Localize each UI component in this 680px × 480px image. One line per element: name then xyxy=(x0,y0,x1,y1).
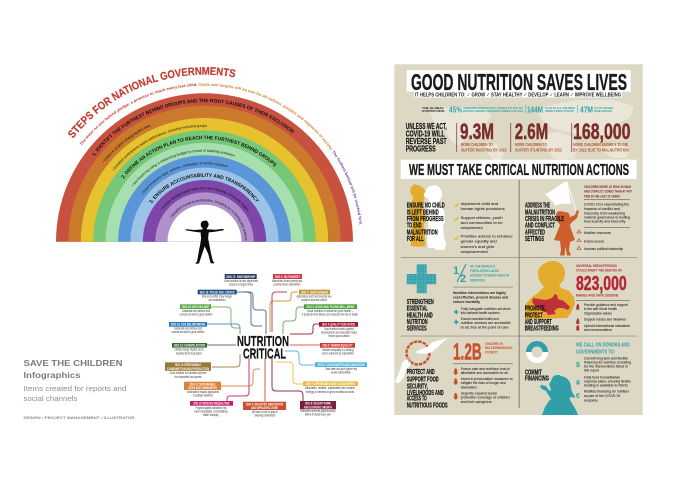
stat: 1.2B: POVERTY xyxy=(485,350,499,354)
diagram: nutrition critical SDG network xyxy=(165,274,367,418)
step 3 heading: 3. ENSURE ACCOUNTABILITY AND TRANSPARENCY xyxy=(149,173,260,204)
SDG 6: SDG 6: CLEAN WATER AND SANITATION xyxy=(318,363,365,367)
heading: PROTECT xyxy=(525,312,543,319)
stat: 2.6M: SUFFER STUNTING BY 2022 xyxy=(515,148,563,152)
conflict risk text: food scarcity and insecurity. xyxy=(584,220,626,224)
stat: 168,000: MORE CHILDREN UNDER 5 TO DIE xyxy=(573,142,628,147)
global nutrition crisis stats: DEATHS AMONG CHILDREN UNDER 5 IN 2019 xyxy=(463,109,523,113)
conflict risk text xyxy=(584,185,632,228)
stat: 2.6M: 2.6M xyxy=(515,119,548,144)
icon: orange girl holding white flag xyxy=(545,181,579,256)
SDG 7: Affordable, reliable, sustainable and modern xyxy=(305,386,355,390)
global nutrition crisis stats: 21.3% OF ALL CHILDREN xyxy=(545,106,575,110)
SDG 16: War and conflict show hunger xyxy=(202,294,233,298)
SDG 9: SDG 9: INDUSTRY, INNOVATION xyxy=(246,402,283,406)
SDG 12: Good nutrition is a needed outcome xyxy=(170,371,207,375)
food security actions: starvation. xyxy=(461,385,478,389)
food security actions: affordable and accessible for all. xyxy=(461,371,509,375)
SDG 10: SDG 10: REDUCED INEQUALITIES xyxy=(194,402,230,406)
interventions text: to all, free at the point of care xyxy=(461,325,509,329)
stat: one half: ACCESS TO BASIC HEALTH xyxy=(470,274,509,278)
global nutrition crisis stats: 47M xyxy=(580,105,593,114)
donor actions: Fully fund humanitarian xyxy=(584,375,620,379)
section: commit financing xyxy=(525,343,631,415)
donor actions: Mobilise financing for nutrition xyxy=(584,390,629,394)
breastfeeding actions: Uphold international standards xyxy=(584,324,630,328)
heading: MALNUTRITION xyxy=(525,209,555,216)
step 2 bullet b: • Enact treatment laws, policies, campaigns to tackle exclusion xyxy=(142,162,228,194)
stat: 823,000: COULD AVERT THE DEATHS OF xyxy=(576,269,623,273)
icon: gold mother and red baby xyxy=(525,261,575,319)
stat: 9.3M: MORE CHILDREN TO xyxy=(461,142,493,147)
donor actions: as part of the COVID-19 xyxy=(584,394,620,398)
SDG 3 xyxy=(302,304,358,317)
SDG 15: Sustainable and nutritious food xyxy=(182,309,210,313)
SDG 1: poverty drives malnutrition xyxy=(274,282,301,286)
heading: NUTRITION xyxy=(407,319,428,326)
heading xyxy=(407,299,434,332)
SDG 3: it protects from illness and reduces the risk of death xyxy=(302,313,358,317)
heading: IS LEFT BEHIND xyxy=(407,209,439,216)
heading xyxy=(407,203,445,243)
icon: wheat ring and white hands xyxy=(395,338,448,383)
stat: 9.3M xyxy=(456,119,507,152)
stat: 1.2B: MULTIDIMENSIONAL xyxy=(485,346,514,350)
interventions text: nutrition services are accessible xyxy=(461,321,511,325)
donor actions: this report xyxy=(584,369,599,373)
breastfeeding actions: Support nurses and midwives xyxy=(584,318,626,322)
food security actions xyxy=(453,367,513,404)
checklist xyxy=(454,202,513,254)
checklist: Prioritise actions to enhance xyxy=(461,235,513,239)
SDG 4: SDG 4: QUALITY EDUCATION xyxy=(322,323,355,327)
SDG 13: impacted by the food system xyxy=(176,352,202,356)
caption: save the children infographics: Infographics xyxy=(24,370,81,380)
SDG 6: avoid malnutrition xyxy=(331,370,351,374)
stat: one half: SERVICES xyxy=(470,278,486,282)
title: steps for national governments: STEPS FOR NATIONAL GOVERNMENTS xyxy=(68,67,236,138)
section: ensure no child is left behind xyxy=(407,184,513,254)
heading: SETTINGS xyxy=(525,236,544,243)
stat: 1.2B: CHILDREN IN xyxy=(485,342,503,346)
donor actions: € xyxy=(576,393,580,400)
SDG 5: Gender inequality is a driving, xyxy=(322,348,354,352)
donor actions: funding is available to NGOs xyxy=(584,384,628,388)
subheading with checkmarks: IT HELPS CHILDREN TO: ✓ GROW ✓ STAY HEALTHY ✓ DEVELOP ✓ LEARN ✓ IMPROVE WELLBEING xyxy=(415,93,621,99)
SDG 9: AND INFRASTRUCTURE xyxy=(251,406,278,410)
food security actions: mitigate the risks of hunger and xyxy=(461,381,506,385)
heading: STRENGTHEN xyxy=(407,299,434,306)
actions list: Ensure access xyxy=(584,240,604,244)
SDG 13: Climate change impacts and is xyxy=(174,348,204,352)
SDG 16 xyxy=(198,290,237,302)
SDG 4: development and education helps xyxy=(321,330,357,334)
section dividers xyxy=(401,180,637,408)
step 3 bullet a: • Publish disaggregated data and start mapping community targets xyxy=(161,186,249,212)
checklist: empowerment xyxy=(461,250,488,254)
SDG 5: SDG 5: GENDER EQUALITY xyxy=(322,344,353,348)
SDG 11: CITIES AND COMMUNITIES xyxy=(188,386,217,390)
call to donors heading: GOVERNMENTS TO: xyxy=(576,349,615,355)
global nutrition crisis stats: THE GLOBAL xyxy=(422,106,444,110)
SDG 5: and is enforced by malnutrition xyxy=(322,352,354,356)
global nutrition crisis stats: NUTRITION CRISIS: xyxy=(422,109,445,113)
heading: NUTRITIOUS FOODS xyxy=(407,403,448,410)
conflict risk text: COVID-19 is exacerbating the xyxy=(584,203,629,207)
conflict risk text: impacts of conflict and xyxy=(584,207,620,211)
SDG 9 xyxy=(243,402,286,418)
icon: teal woman xyxy=(540,375,578,415)
checklist: Support children, youth xyxy=(461,216,503,220)
global nutrition crisis stats: UNDER 5 WERE STUNTED xyxy=(545,109,574,113)
donor actions: Commit long-term and flexible xyxy=(584,356,628,360)
conflict risk text: national governance to fuelling xyxy=(584,215,630,219)
stat: 823,000: BABIES AND SAVE US$300B xyxy=(576,293,618,297)
heading: nutrition critical: NUTRITION xyxy=(237,333,289,350)
conflict risk text: TIME IN THE LAST 20 YEARS xyxy=(584,194,620,198)
SDG 12: SDG 12: RESPONSIBLE xyxy=(175,363,201,367)
heading: nutrition critical xyxy=(237,333,289,362)
SDG 10: wider inequity. xyxy=(203,413,219,417)
donor actions: response xyxy=(584,398,598,402)
SDG 1: Malnutrition drives poverty and xyxy=(272,279,302,283)
interventions text xyxy=(453,291,511,329)
heading: SUPPORT FOOD xyxy=(407,376,439,383)
SDG 15 xyxy=(180,304,213,316)
SDG 11: to tackling malnutrition xyxy=(193,394,213,398)
caption: save the children infographics xyxy=(24,358,135,420)
SDG 17: Good nutrition is inter-dependent xyxy=(224,279,258,283)
text: unless we act: COVID-19 WILL xyxy=(406,130,445,139)
SDG 8: Malnutrition prevents global economy xyxy=(300,409,336,413)
actions list: Increase political leadership xyxy=(584,247,623,251)
caption: save the children infographics: social channels xyxy=(24,394,78,403)
SDG 4 xyxy=(319,322,358,338)
stat: 2.6M: MORE CHILDREN TO xyxy=(515,142,548,147)
icon: teal medical cross xyxy=(407,264,436,293)
heading xyxy=(525,369,549,383)
donor actions xyxy=(576,356,631,402)
checklist: empowered xyxy=(461,226,483,230)
breastfeeding actions: Organization advice xyxy=(584,311,612,315)
actions list: Mobilise resources xyxy=(584,231,611,235)
heading xyxy=(525,203,564,243)
heading: FINANCING xyxy=(525,376,549,383)
heading: SERVICES xyxy=(407,325,427,332)
step 1 heading: 1. IDENTIFY THE FURTHEST BEHIND GROUPS AND THE ROOT CAUSES OF THEIR EXCLUSION xyxy=(92,98,294,156)
food security actions: and their caregivers. xyxy=(461,400,493,404)
heading: PROTECT AND xyxy=(407,369,435,376)
interventions text: reduce mortality xyxy=(453,300,481,304)
panel: good nutrition saves lives xyxy=(394,64,643,415)
heading: FOR ALL xyxy=(407,236,424,243)
SDG 2: Agriculture and food security are xyxy=(296,294,332,298)
global nutrition crisis stats: WERE WASTED xyxy=(594,109,612,113)
call to donors heading: WE CALL ON DONORS AND xyxy=(576,343,630,349)
global nutrition crisis stats xyxy=(422,105,613,114)
SDG 1 xyxy=(272,274,302,286)
stat: 168,000 xyxy=(571,119,630,152)
conflict risk text: AND CONFLICT ZONES THAN AT ANY xyxy=(584,190,632,194)
SDG 6 xyxy=(315,362,367,374)
SDG 6: Clean water and good hygiene help xyxy=(325,367,357,371)
SDG 7: energy is needed to grow nutritious foods xyxy=(306,390,354,394)
pledge subtitle arc: The leave no one behind pledge: a promise to reach every last child. Goals and targets will be met for all nations, peoples and segments of society. The furthest behind will be reached first. xyxy=(80,82,362,226)
food security actions: Invest in preservation measures to xyxy=(461,377,513,381)
SDG 4: Good nutrition boosts cognitive xyxy=(324,327,354,331)
SDG 10 xyxy=(190,401,233,417)
heading: AFFECTED xyxy=(525,229,545,236)
SDG 14 xyxy=(169,322,207,334)
conflict risk text: insecurity, from weakening xyxy=(584,211,625,215)
actions list xyxy=(577,230,623,251)
stat: one half: OF THE WORLD'S xyxy=(470,264,496,268)
heading: LIVELIHOODS AND xyxy=(407,390,444,397)
text: unless we act xyxy=(406,122,447,154)
heading: PROMOTE, xyxy=(525,306,546,313)
SDG 4: inform good nutrition xyxy=(328,334,350,338)
SDG 11 xyxy=(184,382,221,398)
SDG 12 xyxy=(165,362,211,379)
SDG 10: Progress against malnutrition has xyxy=(196,406,227,410)
stat: 823,000: UNIVERSAL BREASTFEEDING xyxy=(576,264,617,268)
SDG 17 xyxy=(224,274,258,286)
step 2 bullet a: • Set financing using a disbursing budget to invest in tackling exclusion xyxy=(132,149,235,186)
donor actions: response plans, ensuring flexible xyxy=(584,380,631,384)
stat: 9.3M: 9.3M xyxy=(460,119,494,144)
heading: AND SUPPORT xyxy=(525,319,552,326)
SDG 11: Urbanisation impacts approaches xyxy=(187,390,219,394)
SDG 3: SDG 3: GOOD HEALTH AND WELL-BEING xyxy=(306,305,355,309)
call to donors heading xyxy=(576,343,630,355)
heading: MALNUTRITION xyxy=(407,229,438,236)
conflict risk text: CHILDREN MORE AT RISK IN WAR xyxy=(584,185,631,189)
interventions text: Fully integrate nutrition services xyxy=(461,307,511,311)
icon: gold and white children xyxy=(409,184,446,250)
stat: 168,000: BY 2022 DUE TO MALNUTRITION xyxy=(573,148,629,152)
SDG 16: SDG 16: PEACE AND JUSTICE xyxy=(200,290,235,294)
heading: BREASTFEEDING xyxy=(525,326,559,333)
stat: one half: 2 xyxy=(460,273,466,285)
stat: 1.2B: 1.2B xyxy=(453,338,482,364)
food security actions: protection coverage of children xyxy=(461,396,510,400)
donor actions: for the interventions listed in xyxy=(584,364,628,368)
stat: one half xyxy=(453,264,513,288)
heading: COMMIT xyxy=(525,369,542,376)
panel: rainbow steps for national governments xyxy=(56,67,362,264)
breastfeeding actions xyxy=(576,303,630,332)
breastfeeding actions: and recommendations xyxy=(584,328,612,332)
step 1 bullet b: • Establish participatory public deliberations, including excluded groups xyxy=(112,124,207,170)
heading: CRISIS IN FRAGILE xyxy=(525,216,564,223)
SDG 9: All have a role to play in xyxy=(252,410,278,414)
SDG 13 xyxy=(172,343,207,356)
SDG 13: SDG 13: CLIMATE ACTION xyxy=(174,344,205,348)
stat: one half: POPULATION LACKS xyxy=(470,269,500,273)
heading: ENSURE NO CHILD xyxy=(407,203,445,210)
caption: save the children infographics: SAVE THE CHILDREN xyxy=(24,358,122,368)
SDG 12: from responsible food systems xyxy=(174,375,202,379)
heading: SECURITY, xyxy=(407,383,428,390)
rainbow bands xyxy=(56,93,353,242)
SDG 15: sources are vital for good nutrition xyxy=(180,312,213,316)
SDG 17: SDG 17: PARTNERSHIP xyxy=(226,275,256,279)
SDG 14: SDG 14: LIFE BELOW WATER xyxy=(171,323,205,327)
section: protect and support food security xyxy=(395,338,514,410)
stat: 9.3M: SUFFER WASTING BY 2022 xyxy=(461,148,507,152)
heading xyxy=(407,369,448,410)
heading: nutrition critical: CRITICAL xyxy=(243,346,286,362)
global nutrition crisis stats: 45% xyxy=(449,105,462,114)
donor actions: financing for nutrition, including xyxy=(584,360,631,364)
checklist: women's and girls' xyxy=(461,245,495,249)
heading: ESSENTIAL xyxy=(407,306,428,313)
step 1 bullet a: • Collect & analyse disaggregated data xyxy=(103,124,151,162)
SDG 2: SDG 2: ZERO HUNGER xyxy=(301,290,328,294)
SDG 5 xyxy=(320,343,355,356)
SDG 2: crucial for improved nutrition xyxy=(301,298,327,302)
heading: AND CONFLICT xyxy=(525,223,555,230)
connector lines xyxy=(207,292,320,401)
heading: ACCESS TO xyxy=(407,396,427,403)
interventions text: cost-effective, prevent disease and xyxy=(453,295,509,299)
SDG 1: SDG 1: NO POVERTY xyxy=(275,275,301,279)
global nutrition crisis stats: UNDERNUTRITION WAS LINKED TO 45% OF xyxy=(463,106,523,110)
stat: 823,000: 823,000 xyxy=(576,273,627,295)
text: unless we act: PROGRESS xyxy=(406,145,436,154)
text: unless we act: UNLESS WE ACT, xyxy=(406,122,447,131)
SDG 17: success on emerged children xyxy=(229,282,253,286)
interventions text: Nutrition interventions are highly xyxy=(453,291,507,295)
icon: donut of coins xyxy=(529,344,545,360)
global nutrition crisis stats: 6.9% OF CHILDREN xyxy=(594,106,613,110)
stat: one half: 1 xyxy=(453,265,459,277)
breastfeeding actions: Provide guidance and support xyxy=(584,303,628,307)
SDG 8: SDG 8: DECENT WORK xyxy=(305,402,331,406)
food security actions: Urgently expand social xyxy=(461,392,497,396)
SDG 8: AND ECONOMIC GROWTH xyxy=(304,405,332,409)
caption: save the children infographics: Items created for reports and xyxy=(24,384,126,393)
caption: save the children infographics: DESIGN • PROJECT MANAGEMENT • ILLUSTRATOR xyxy=(24,415,135,420)
heading: ADDRESS THE xyxy=(525,203,550,210)
heading: TO END xyxy=(407,223,422,230)
SDG 3: Good nutrition is critical for good health – xyxy=(307,309,353,313)
SDG 7: SDG 7: AFFORDABLE AND CLEAN ENERGY xyxy=(306,382,355,386)
food security actions: Ensure safe and nutritious food is xyxy=(461,367,510,371)
checklist: gender equality and xyxy=(461,240,497,244)
step 3 bullet b: • Establish inclusive participation, including for excluding data sections xyxy=(170,198,247,240)
SDG 9: lowering malnutrition xyxy=(254,414,276,418)
breastfeeding actions: in line with World Health xyxy=(584,307,617,311)
icon: child silhouette with arms outstretched xyxy=(186,220,224,264)
SDG 2 xyxy=(296,290,332,302)
checklist: and communities to be xyxy=(461,221,503,225)
stat: 168,000: 168,000 xyxy=(573,119,630,144)
section: strengthen essential health xyxy=(407,264,513,332)
text: unless we act: REVERSE PAST xyxy=(406,137,447,146)
SDG 8: billions of dollars every year xyxy=(305,413,332,417)
SDG 10: been inequitable, consolidating xyxy=(194,409,228,413)
interventions text: into national health systems xyxy=(461,311,500,315)
heading: HEALTH AND xyxy=(407,312,433,319)
heading xyxy=(525,306,559,333)
stat: 823,000 xyxy=(576,264,630,301)
section: breastfeeding xyxy=(525,261,630,333)
step 2 heading: 2. DEFINE AN ACTION PLAN TO REACH THE FURTHEST BEHIND GROUPS xyxy=(121,136,276,179)
section: address the malnutrition crisis xyxy=(525,181,632,256)
world map xyxy=(430,100,634,160)
SDG 11: SDG 11: SUSTAINABLE xyxy=(190,382,216,386)
SDG 14: Sustainable and nutritious food xyxy=(174,326,202,330)
heading: FROM PROGRESS xyxy=(407,216,444,223)
SDG 8 xyxy=(300,401,336,417)
SDG 16: and malnutrition xyxy=(208,298,226,302)
checklist: human rights provisions xyxy=(461,207,505,211)
donor actions: $ xyxy=(576,362,580,369)
interventions text: Ensure essential health and xyxy=(461,317,499,321)
stat: 2.6M xyxy=(510,119,563,152)
SDG 7 xyxy=(303,381,358,394)
global nutrition crisis stats: 144M xyxy=(527,105,543,114)
checklist: Implement child and xyxy=(461,202,498,206)
SDG 14: sources are vital for good nutrition xyxy=(172,330,205,334)
SDG 15: SDG 15: LIFE ON LAND xyxy=(182,305,209,309)
donor actions: ¥ xyxy=(576,380,580,387)
SDG 12: CONSUMPTION AND PRODUCTION xyxy=(167,367,209,371)
panel background xyxy=(394,64,643,415)
